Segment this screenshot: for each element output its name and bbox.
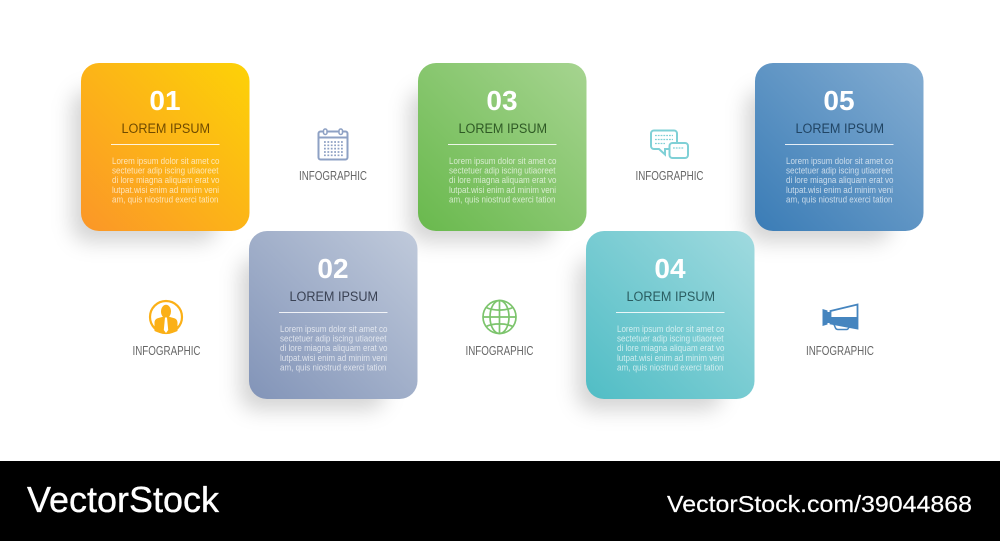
panel: step 05: LOREM IPSUM — [796, 121, 884, 137]
footer logo: VectorStock — [27, 479, 220, 520]
label: calendar: INFOGRAPHIC — [299, 169, 367, 183]
panel: step 04: 04 — [654, 253, 686, 284]
icon: globe — [483, 300, 516, 334]
label: megaphone: INFOGRAPHIC — [806, 344, 874, 358]
panel: step 03: lutpat.wisi enim ad minim veni — [449, 185, 556, 195]
panel: step 04 — [577, 231, 754, 410]
panel: step 02: LOREM IPSUM — [290, 289, 378, 305]
label: globe: INFOGRAPHIC — [466, 344, 534, 358]
footer bar — [0, 461, 1000, 541]
label: speech bubbles: INFOGRAPHIC — [636, 169, 704, 183]
panel: step 03: LOREM IPSUM — [458, 121, 547, 137]
label: businessman: INFOGRAPHIC — [132, 344, 200, 358]
panel: step 05: Lorem ipsum dolor sit amet co — [786, 156, 894, 166]
panel: step 05: sectetuer adip iscing utiaoreet — [786, 166, 893, 176]
panel: step 05 — [746, 63, 924, 242]
panel: step 04: lutpat.wisi enim ad minim veni — [617, 353, 724, 363]
panel: step 03: Lorem ipsum dolor sit amet co — [449, 156, 556, 166]
panel: step 05: lutpat.wisi enim ad minim veni — [786, 185, 893, 195]
panel: step 04: LOREM IPSUM — [626, 289, 715, 305]
panel: step 04: Lorem ipsum dolor sit amet co — [617, 324, 724, 334]
panel: step 05: am, quis niostrud exerci tation — [786, 194, 892, 204]
icon: megaphone — [822, 304, 858, 330]
panel: step 01: di lore miagna aliquam erat vo — [112, 175, 220, 185]
panel: step 03: sectetuer adip iscing utiaoreet — [449, 166, 556, 176]
panel: step 03: di lore miagna aliquam erat vo — [449, 175, 556, 185]
panel: step 02: lutpat.wisi enim ad minim veni — [280, 353, 387, 363]
panel: step 04: am, quis niostrud exerci tation — [617, 362, 724, 372]
panel: step 02: Lorem ipsum dolor sit amet co — [280, 324, 388, 334]
panel: step 05: di lore miagna aliquam erat vo — [786, 175, 894, 185]
panel: step 01: am, quis niostrud exerci tation — [112, 194, 218, 204]
icon: businessman — [150, 301, 182, 334]
panel: step 03 — [409, 63, 586, 242]
panel: step 01: sectetuer adip iscing utiaoreet — [112, 166, 219, 176]
panel: step 01 — [72, 63, 250, 242]
panel: step 01: lutpat.wisi enim ad minim veni — [112, 185, 219, 195]
panel: step 01: LOREM IPSUM — [122, 121, 210, 137]
panel: step 03: 03 — [486, 85, 518, 116]
panel: step 01: Lorem ipsum dolor sit amet co — [112, 156, 220, 166]
panel: step 04: di lore miagna aliquam erat vo — [617, 343, 724, 353]
icon: speech bubbles — [651, 130, 688, 158]
icon: calendar — [318, 129, 348, 160]
panel: step 02: 02 — [317, 253, 349, 284]
panel: step 02: am, quis niostrud exerci tation — [280, 362, 386, 372]
panel: step 03: am, quis niostrud exerci tation — [449, 194, 556, 204]
panel: step 05: 05 — [823, 85, 855, 116]
panel: step 02 — [240, 231, 418, 410]
panel: step 04: sectetuer adip iscing utiaoreet — [617, 334, 724, 344]
panel: step 02: di lore miagna aliquam erat vo — [280, 343, 388, 353]
panel: step 01: 01 — [149, 85, 181, 116]
panel: step 02: sectetuer adip iscing utiaoreet — [280, 334, 387, 344]
footer url: VectorStock.com/39044868 — [667, 491, 972, 517]
